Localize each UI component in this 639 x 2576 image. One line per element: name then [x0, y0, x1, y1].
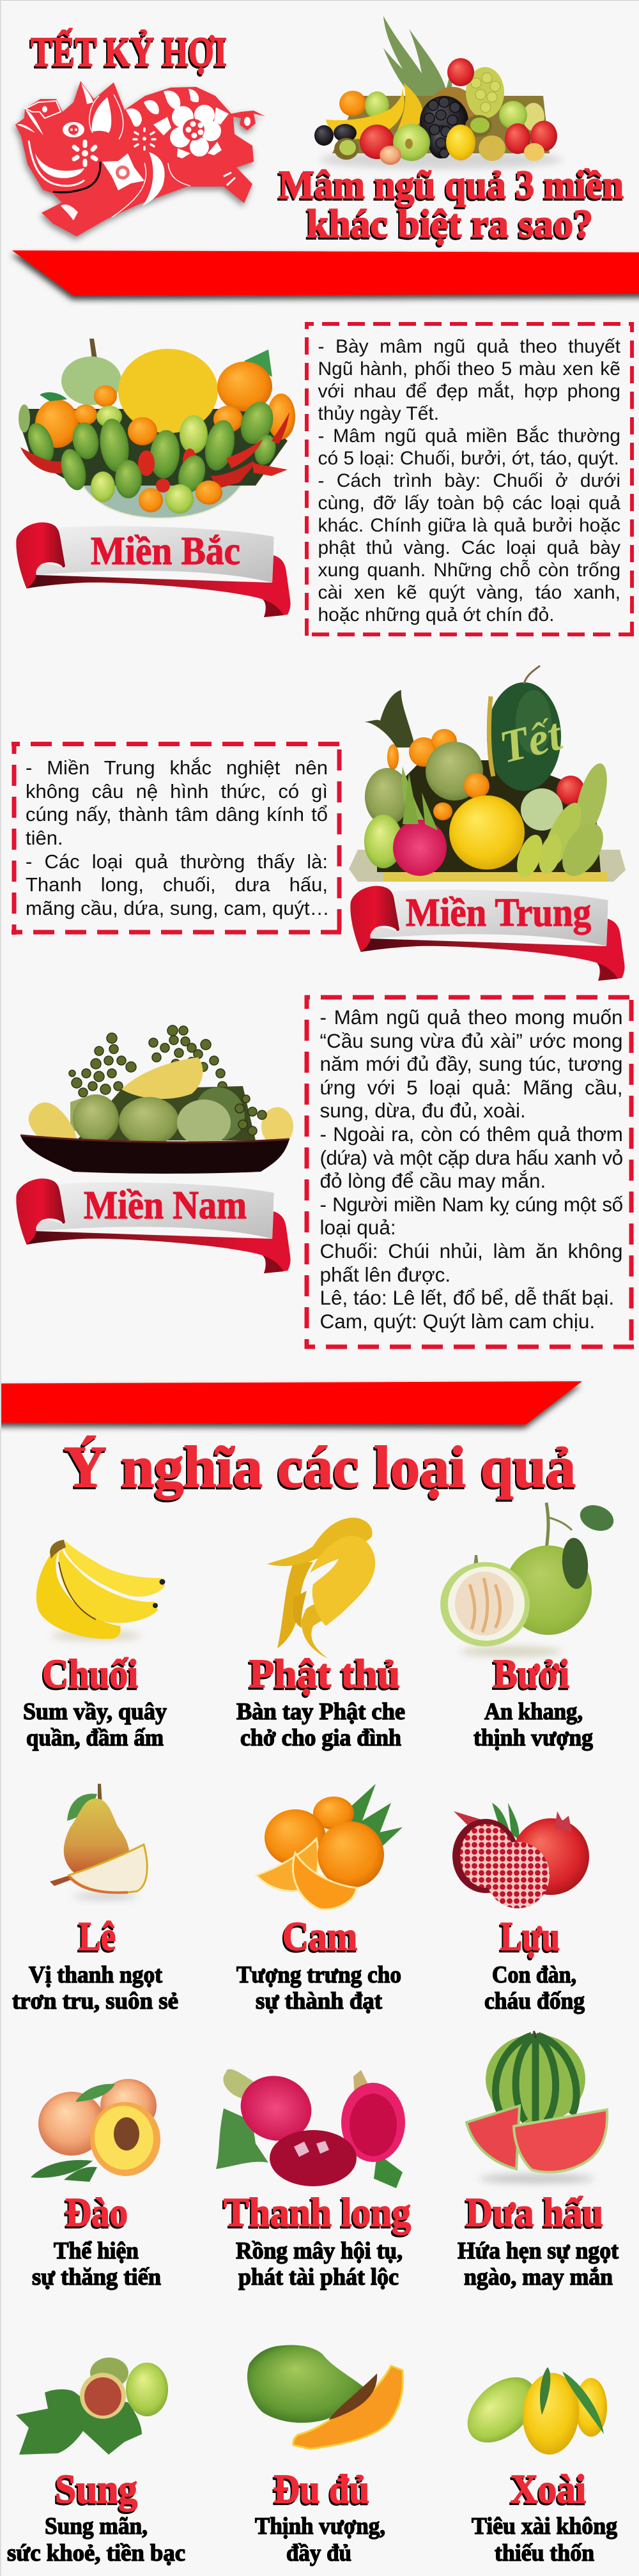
meaning: Bưởi: An khang,	[484, 1699, 583, 1725]
text block: Miền Nam: Chuối: Chúi nhủi, làm ăn không	[320, 1239, 622, 1262]
label: Dưa hấu: Dưa hấu	[466, 2189, 603, 2235]
text block: Miền Trung: cúng nấy, thành tâm dâng kính tổ	[26, 803, 328, 825]
label: Phật thủ: Phật thủ	[249, 1651, 400, 1696]
meaning: Bưởi	[473, 1699, 593, 1751]
fruit: Xoài	[455, 2365, 617, 2566]
text block: Miền Nam: loại quả:	[320, 1216, 396, 1239]
ribbon: Miền Bắc: Miền Bắc	[91, 530, 240, 573]
fruit: Đu đủ	[247, 2345, 403, 2566]
label: Chuối: Chuối	[42, 1651, 138, 1696]
text block: Miền Bắc: cùng, đỡ lấy toàn bộ các loại quả	[318, 493, 620, 514]
icon: papaya	[247, 2345, 403, 2449]
label: Đu đủ: Đu đủ	[273, 2466, 369, 2511]
meaning: Lê: trơn tru, suôn sẻ	[12, 1988, 178, 2014]
meaning: Lựu	[484, 1962, 585, 2014]
meaning: Lựu: cháu đống	[484, 1988, 585, 2014]
dashed frame: Miền Nam	[305, 995, 634, 1349]
meaning: Sung	[7, 2513, 185, 2566]
ribbon: Miền Nam: Miền Nam	[84, 1184, 247, 1227]
meaning: Phật thủ	[236, 1699, 405, 1751]
tray of fruit: Miền Trung	[349, 666, 626, 883]
label: Sung: Sung	[55, 2466, 137, 2511]
icon: pear	[50, 1784, 147, 1899]
text block: Miền Trung: - Miền Trung khắc nghiệt nên	[26, 756, 328, 779]
text block: Miền Bắc: hoặc những quả ớt chín đỏ.	[318, 604, 555, 625]
big flower on the pig's body	[153, 105, 229, 158]
text block: Miền Nam: đỏ lòng để cầu may mắn.	[320, 1169, 546, 1192]
meaning: Thanh long: phát tài phát lộc	[238, 2264, 399, 2290]
text block: Miền Trung: tiên.	[26, 827, 63, 849]
dashed frame: Miền Bắc	[305, 322, 634, 636]
flower on the shoulder	[102, 153, 144, 190]
small daisies	[74, 142, 96, 165]
red banner 2	[0, 1381, 582, 1425]
meaning: Phật thủ: Bàn tay Phật che	[236, 1699, 405, 1725]
icon: peaches	[31, 2079, 166, 2182]
icon: bananas	[36, 1540, 165, 1641]
meaning: Dưa hấu: ngào, may mắn	[464, 2264, 613, 2290]
meaning: Lựu: Con đàn,	[492, 1962, 576, 1988]
text block: Miền Bắc: có 5 loại: Chuối, bưởi, ớt, táo, quýt.	[318, 448, 619, 469]
meaning: Sung: Sung mãn,	[45, 2513, 148, 2540]
fruit: Đào	[31, 2079, 166, 2290]
text block: Miền Trung: Thanh long, chuối, dưa hấu,	[26, 873, 328, 896]
ribbon: Miền Nam	[16, 1179, 291, 1273]
meaning: Bưởi: thịnh vượng	[473, 1725, 593, 1751]
text block: Miền Trung: mãng cầu, dứa, sung, cam, quýt…	[26, 897, 330, 919]
meaning: Cam: sự thành đạt	[256, 1988, 383, 2014]
text block: Miền Bắc: cài xen kẽ quýt vàng, táo xanh,	[318, 582, 620, 603]
text block: Miền Nam: - Người miền Nam kỵ cúng một số	[320, 1193, 622, 1216]
dashed frame: Miền Trung	[12, 742, 341, 935]
meaning: Chuối: quần, đầm ấm	[26, 1725, 164, 1751]
fruit: Dưa hấu	[458, 2031, 619, 2290]
meaning: Thanh long	[236, 2238, 403, 2290]
text block: Miền Nam: sung, dừa, đu đủ, xoài.	[320, 1099, 526, 1122]
text block: Miền Nam: Cam, quýt: Quýt làm cam chịu.	[320, 1310, 595, 1333]
red banner 1	[12, 250, 639, 296]
text block: Miền Bắc: - Cách trình bày: Chuối ở dưới	[318, 470, 620, 491]
meaning: Phật thủ: chở cho gia đình	[240, 1725, 401, 1751]
text block: Miền Nam: - Ngoài ra, còn có thêm quả thơm	[320, 1123, 622, 1146]
meaning: Đào: sự thăng tiến	[32, 2264, 161, 2290]
icon: mangoes	[455, 2365, 607, 2457]
text block: Miền Bắc: phật thủ vàng. Các loại quả bày	[318, 537, 620, 558]
ribbon: Miền Trung: Miền Trung	[406, 891, 591, 935]
meaning: Lê	[12, 1962, 178, 2014]
meaning: Đu đủ: Thịnh vượng,	[255, 2513, 385, 2540]
text block: Miền Bắc: - Mâm ngũ quả miền Bắc thường	[318, 425, 620, 447]
text block: Miền Nam: “Cầu sung vừa đủ xài” ước mong	[320, 1029, 622, 1052]
heading: Ý nghĩa các loại quả: Ý nghĩa các loại quả	[64, 1434, 576, 1499]
icon: Buddha's hand	[267, 1518, 375, 1659]
fruit: Sung	[7, 2358, 185, 2566]
text block: Miền Nam: ứng với 5 loại quả: Mãng cầu,	[320, 1076, 622, 1099]
icon: figs on a leaf	[16, 2358, 168, 2455]
ribbon: Miền Bắc	[16, 523, 291, 617]
meaning: Cam	[236, 1962, 401, 2014]
label: Xoài: Xoài	[511, 2466, 586, 2511]
meaning: Dưa hấu: Hứa hẹn sự ngọt	[458, 2238, 619, 2264]
meaning: Dưa hấu	[458, 2238, 619, 2290]
fruit: Chuối	[23, 1540, 167, 1751]
text block: Miền Nam: phất lên được.	[320, 1263, 450, 1286]
meaning: Xoài: thiếu thốn	[495, 2540, 594, 2566]
icon: pomegranates	[452, 1803, 589, 1908]
subtitle: Mâm ngũ quả 3 miền khác biệt ra sao: khác biệt ra sao?	[307, 203, 593, 246]
icon: oranges	[256, 1784, 403, 1910]
ribbon: Miền Trung	[350, 886, 625, 981]
text block: Miền Trung: không câu nệ hình thức, có gì	[26, 780, 328, 802]
text block: Miền Trung	[26, 756, 330, 919]
label: Đào: Đào	[65, 2189, 128, 2235]
text block: Miền Nam: - Mâm ngũ quả theo mong muốn	[320, 1006, 622, 1029]
meaning: Cam: Tượng trưng cho	[236, 1962, 401, 1988]
title: Tết Kỷ Hợi: TẾT KỶ HỢI	[31, 28, 227, 75]
text block: Miền Bắc: - Bày mâm ngũ quả theo thuyết	[318, 336, 620, 357]
meaning: Chuối: Sum vầy, quây	[23, 1699, 167, 1725]
fruit: Phật thủ	[236, 1518, 405, 1751]
fruit pile illustration	[314, 16, 562, 169]
meaning: Đào: Thể hiện	[54, 2238, 139, 2264]
meaning: Đu đủ	[255, 2513, 385, 2566]
text block: Miền Nam: Lê, táo: Lê lết, đổ bể, dễ thất bại.	[320, 1286, 614, 1309]
fruit: Cam	[236, 1784, 403, 2014]
meaning: Đu đủ: đầy đủ	[286, 2540, 351, 2566]
label: Lựu: Lựu	[500, 1913, 560, 1959]
text block: Miền Bắc	[318, 336, 620, 625]
label: Cam: Cam	[282, 1913, 357, 1959]
text block: Miền Bắc: với nhau để đẹp mắt, hợp phong	[318, 381, 620, 402]
meaning: Lê: Vị thanh ngọt	[29, 1962, 163, 1988]
fruit: Lê	[12, 1784, 178, 2014]
carved word on the watermelon: Tết	[495, 709, 567, 773]
subtitle: Mâm ngũ quả 3 miền khác biệt ra sao	[279, 164, 624, 246]
label: Thanh long: Thanh long	[224, 2189, 411, 2235]
text block: Miền Trung: - Các loại quả thường thấy là:	[26, 850, 328, 873]
icon: watermelon	[466, 2031, 607, 2183]
icon: dragon fruit	[216, 2066, 405, 2188]
fruit: Thanh long	[216, 2066, 411, 2290]
meaning: Xoài: Tiêu xài không	[472, 2513, 617, 2540]
meaning: Chuối	[23, 1699, 167, 1751]
text block: Miền Bắc: thủy ngày Tết.	[318, 403, 439, 424]
plate of fruit: Miền Bắc	[19, 339, 295, 518]
icon: red paper-cut pig	[15, 81, 265, 236]
icon: pomelo	[440, 1501, 617, 1657]
meaning: Thanh long: Rồng mây hội tụ,	[236, 2238, 403, 2264]
meaning: Xoài	[472, 2513, 617, 2566]
meaning: Sung: sức khoẻ, tiền bạc	[7, 2540, 185, 2566]
text block: Miền Bắc: Ngũ hành, phối theo 5 màu xen kẽ	[318, 358, 620, 379]
meaning: Đào	[32, 2238, 161, 2290]
label: Lê: Lê	[79, 1913, 116, 1959]
fruit: Bưởi	[440, 1501, 617, 1751]
text block: Miền Nam: (dứa) và một cặp dưa hấu xanh vỏ	[320, 1146, 622, 1169]
fruit: Lựu	[452, 1803, 589, 2014]
basket of fruit: Miền Nam	[20, 1025, 293, 1174]
text block: Miền Bắc: xung quanh. Những chỗ còn trống	[318, 560, 620, 581]
text block: Miền Bắc: khác. Chính giữa là quả bưởi hoặc	[318, 515, 620, 536]
text block: Miền Nam	[320, 1006, 622, 1333]
label: Bưởi: Bưởi	[493, 1651, 569, 1696]
text block: Miền Nam: năm mới đủ đầy, sung túc, tương	[320, 1052, 622, 1075]
subtitle: Mâm ngũ quả 3 miền khác biệt ra sao: Mâm ngũ quả 3 miền	[279, 164, 624, 207]
